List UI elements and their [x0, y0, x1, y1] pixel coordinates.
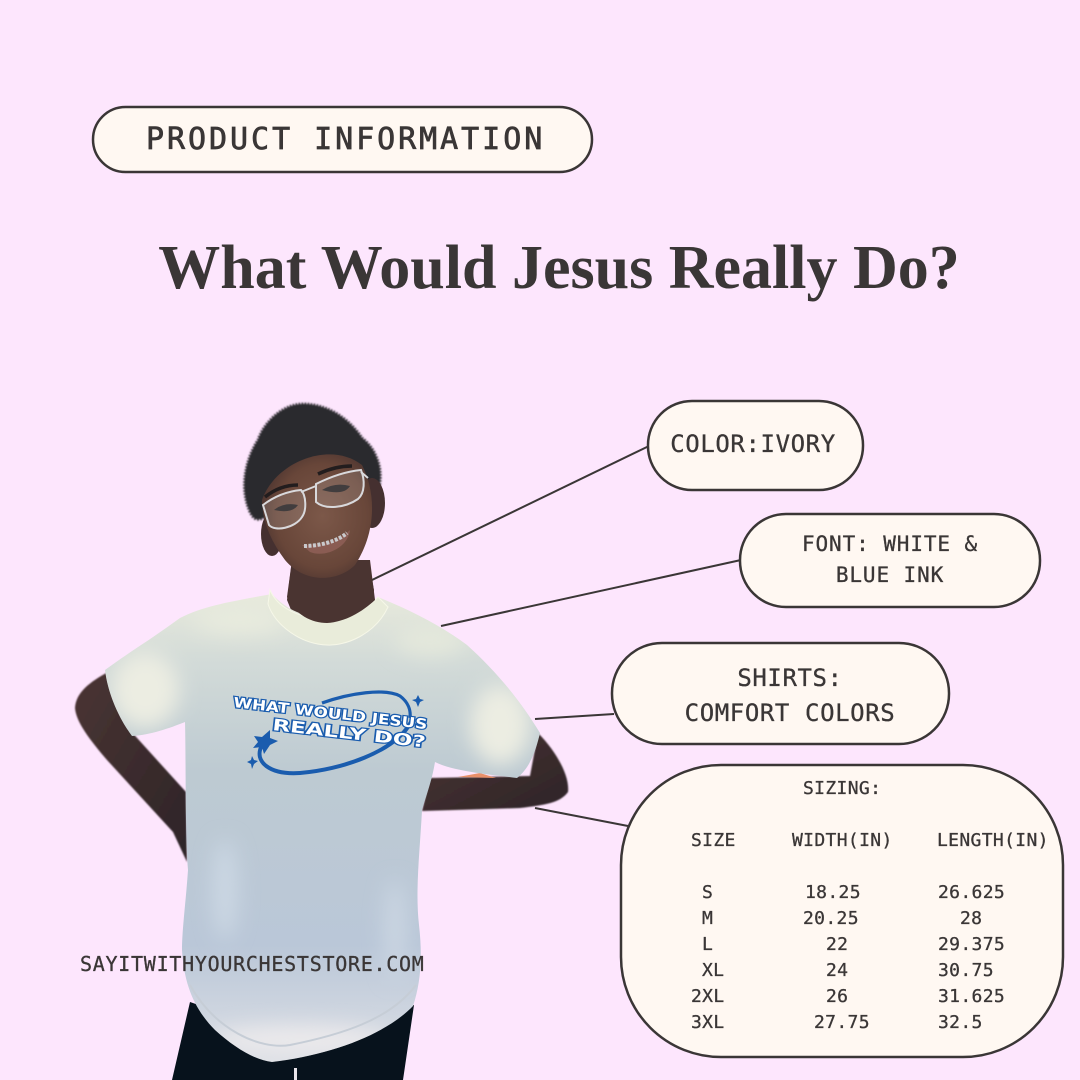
callout: sizing table: SIZING:	[803, 778, 881, 799]
black shorts	[172, 1002, 414, 1080]
ears	[359, 478, 385, 528]
shirt light patches	[111, 606, 530, 1054]
callout: shirts: COMFORT COLORS	[685, 699, 895, 727]
slogan: WHAT WOULD JESUS	[233, 695, 428, 733]
callout: sizing table: SIZE	[691, 830, 736, 851]
shirt hem fold	[200, 999, 403, 1047]
eyes	[274, 485, 350, 511]
smile with braces	[302, 530, 350, 554]
neck	[287, 560, 374, 632]
callout: shirts	[612, 643, 949, 744]
callout: sizing table: 28	[960, 908, 982, 929]
callout: sizing table	[621, 765, 1063, 1057]
header pill: product information	[93, 107, 592, 172]
callout: sizing table: 18.25	[805, 882, 861, 903]
eyebrows	[265, 466, 352, 497]
leader line: sizing	[535, 808, 628, 826]
star top	[412, 695, 424, 707]
callout: color: COLOR:IVORY	[670, 430, 836, 458]
person wearing the shirt	[75, 404, 568, 1080]
store url: SAYITWITHYOURCHESTSTORE.COM	[80, 952, 425, 976]
white gap between shorts	[294, 1068, 297, 1080]
callout: sizing table: 2XL	[691, 986, 725, 1007]
callout: sizing table: WIDTH(IN)	[792, 830, 893, 851]
callout: sizing table: M	[702, 908, 713, 929]
callout: sizing table: 26.625	[938, 882, 1005, 903]
callout: sizing table: 29.375	[938, 934, 1005, 955]
callout: font	[740, 514, 1040, 607]
collar neck opening	[287, 560, 375, 623]
callout: font: FONT: WHITE &	[802, 532, 978, 556]
callout: sizing table: S	[702, 882, 713, 903]
shirt	[105, 594, 540, 1062]
callout: sizing table: XL	[702, 960, 724, 981]
shirt collar	[268, 590, 388, 645]
orange hand glimpse	[458, 773, 496, 778]
callout: sizing table: 20.25	[803, 908, 859, 929]
callout: sizing table: 27.75	[814, 1012, 870, 1033]
header pill: product information: PRODUCT INFORMATION	[146, 122, 545, 157]
callout: sizing table: 22	[826, 934, 848, 955]
star large	[253, 730, 278, 754]
star small	[247, 756, 258, 769]
leader line: font	[441, 560, 741, 626]
callout: sizing table: 32.5	[938, 1012, 983, 1033]
callout: sizing table: L	[702, 934, 713, 955]
callout: sizing table: LENGTH(IN)	[937, 830, 1049, 851]
shirt print: ring, stars and slogan: REALLY DO?	[272, 715, 427, 751]
right arm	[422, 733, 568, 811]
callout: color	[648, 401, 863, 490]
callout: sizing table: 3XL	[691, 1012, 725, 1033]
callout: sizing table: 31.625	[938, 986, 1005, 1007]
leader line: color	[372, 446, 649, 580]
left arm	[75, 672, 187, 862]
callout: font: BLUE INK	[836, 563, 944, 587]
shirt print: ring, stars and slogan	[233, 692, 428, 773]
title: What Would Jesus Really Do?	[158, 234, 960, 302]
leader line: shirts	[535, 714, 614, 719]
glasses	[263, 470, 368, 528]
callout: sizing table: 24	[826, 960, 848, 981]
callout: sizing table: 30.75	[938, 960, 994, 981]
callout: sizing table: 26	[826, 986, 848, 1007]
hair	[244, 404, 380, 519]
callout: shirts: SHIRTS:	[737, 664, 843, 692]
face	[262, 454, 372, 578]
